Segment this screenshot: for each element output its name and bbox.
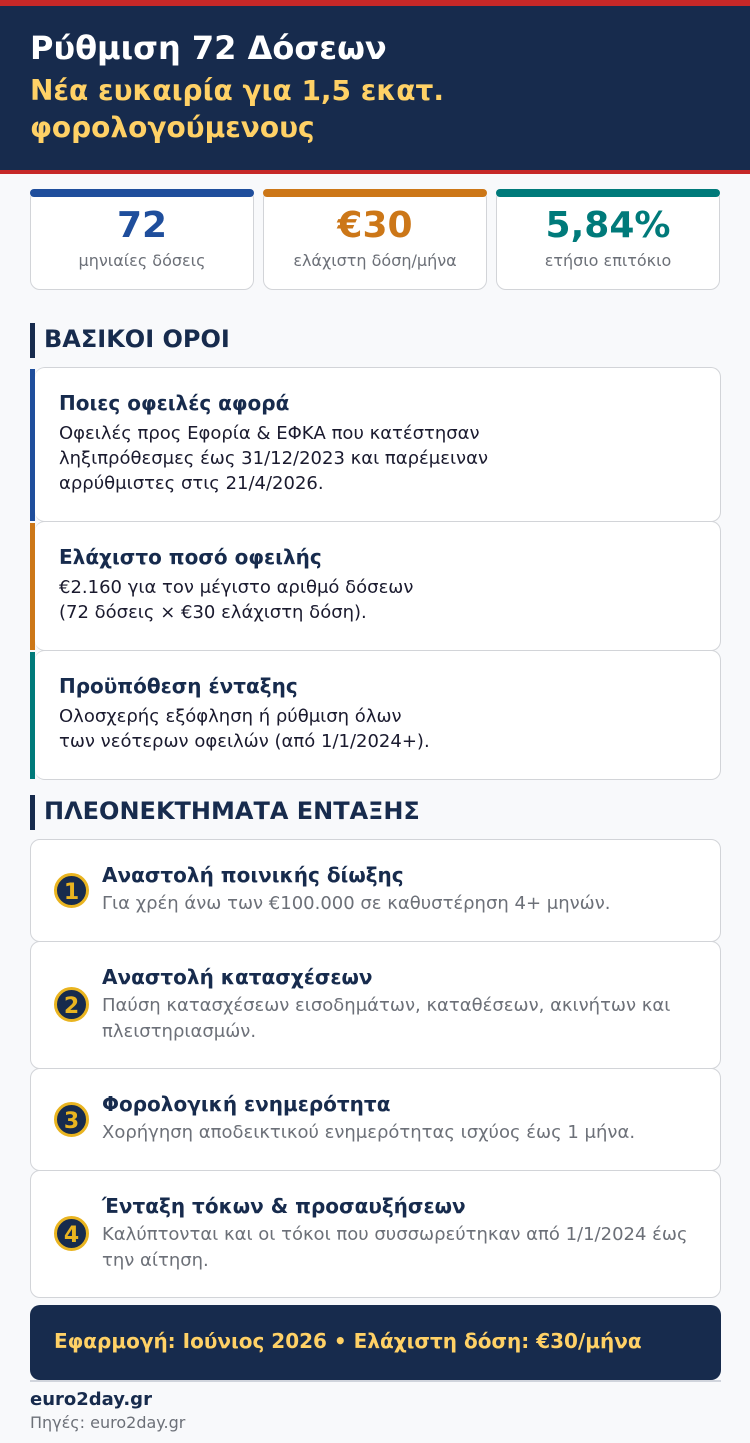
stat card: minimum installment: ελάχιστη δόση/μήνα: [293, 251, 457, 270]
subtitle: [30, 74, 444, 144]
heading: benefits: ΠΛΕΟΝΕΚΤΗΜΑΤΑ ΕΝΤΑΞΗΣ: [44, 797, 420, 825]
term text: των νεότερων οφειλών (από 1/1/2024+).: [59, 731, 430, 752]
subtitle: Νέα ευκαιρία για 1,5 εκατ.: [30, 74, 444, 107]
stat card: 72 installments: μηνιαίες δόσεις: [79, 251, 205, 270]
term text: Ολοσχερής εξόφληση ή ρύθμιση όλων: [59, 706, 402, 727]
subtitle: φορολογούμενους: [30, 111, 315, 144]
term title: Ποιες οφειλές αφορά: [59, 391, 289, 415]
term title: Ελάχιστο ποσό οφειλής: [59, 545, 322, 569]
icon: number 4: [54, 1216, 89, 1251]
stat card: minimum installment: €30: [337, 205, 413, 246]
term text: Οφειλές προς Εφορία & ΕΦΚΑ που κατέστησαν: [59, 423, 480, 444]
icon: number 2: 2: [64, 994, 79, 1019]
stat card: interest rate: [496, 189, 720, 290]
benefit 2: [30, 941, 721, 1069]
benefit 2 title: Αναστολή κατασχέσεων: [102, 965, 373, 989]
icon: number 4: 4: [64, 1223, 79, 1248]
footer brand: euro2day.gr: [30, 1389, 152, 1410]
heading: basic terms: ΒΑΣΙΚΟΙ ΟΡΟΙ: [44, 325, 230, 353]
icon: number 1: 1: [64, 880, 79, 905]
callout banner: [30, 1305, 721, 1380]
panel: prerequisite: [30, 650, 721, 780]
stat card: interest rate: ετήσιο επιτόκιο: [545, 251, 671, 270]
callout banner: Εφαρμογή: Ιούνιος 2026 • Ελάχιστη δόση: €30/μήνα: [54, 1329, 642, 1353]
term text: [59, 706, 430, 752]
benefit 4 text: [102, 1224, 688, 1271]
heading: benefits: [30, 795, 720, 830]
benefit 3 title: Φορολογική ενημερότητα: [102, 1092, 390, 1116]
term text: (72 δόσεις × €30 ελάχιστη δόση).: [59, 602, 367, 623]
icon: number 2: [54, 987, 89, 1022]
benefit 4 title: Ένταξη τόκων & προσαυξήσεων: [102, 1194, 466, 1218]
footer sources: Πηγές: euro2day.gr: [30, 1413, 185, 1432]
icon: number 3: [54, 1102, 89, 1137]
title: Ρύθμιση 72 Δόσεων: [30, 29, 387, 67]
benefit 3 text: Χορήγηση αποδεικτικού ενημερότητας ισχύος έως 1 μήνα.: [102, 1122, 635, 1143]
stat card: 72 installments: [30, 189, 254, 290]
heading: basic terms: [30, 323, 720, 358]
benefit 2 text: [102, 995, 670, 1042]
term text: [59, 577, 413, 623]
banner rule: [30, 1380, 721, 1382]
benefit 3: [30, 1068, 721, 1171]
term text: [59, 423, 488, 494]
header: [0, 0, 750, 174]
term text: ληξιπρόθεσμες έως 31/12/2023 και παρέμειναν: [59, 448, 488, 469]
stat card: 72 installments: 72: [117, 205, 167, 246]
benefit 1 title: Αναστολή ποινικής δίωξης: [102, 863, 404, 887]
stat card: interest rate: 5,84%: [546, 205, 670, 246]
icon: number 1: [54, 873, 89, 908]
panel: which debts: [30, 367, 721, 522]
term text: €2.160 για τον μέγιστο αριθμό δόσεων: [59, 577, 413, 598]
icon: number 3: 3: [64, 1109, 79, 1134]
term text: αρρύθμιστες στις 21/4/2026.: [59, 473, 324, 494]
term title: Προϋπόθεση ένταξης: [59, 674, 298, 698]
benefit 1 text: Για χρέη άνω των €100.000 σε καθυστέρηση 4+ μηνών.: [102, 893, 611, 914]
benefit 4 text: Καλύπτονται και οι τόκοι που συσσωρεύτηκαν από 1/1/2024 έως: [102, 1224, 688, 1245]
benefit 4: [30, 1170, 721, 1298]
benefit 1: [30, 839, 721, 942]
benefit 4 text: την αίτηση.: [102, 1250, 209, 1271]
benefit 2 text: Παύση κατασχέσεων εισοδημάτων, καταθέσεων, ακινήτων και: [102, 995, 670, 1016]
panel: minimum debt: [30, 522, 721, 650]
benefit 2 text: πλειστηριασμών.: [102, 1021, 256, 1042]
stat card: minimum installment: [263, 189, 487, 290]
